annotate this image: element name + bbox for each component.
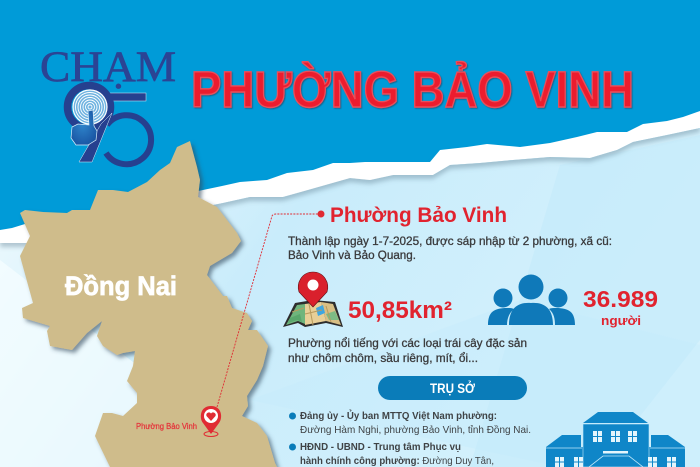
pale lower background	[0, 128, 700, 467]
address item 2: HĐND - UBND - Trung tâm Phục vụ	[300, 441, 461, 453]
stat: area: 50,85km²	[348, 297, 452, 324]
icon: headquarters building	[546, 412, 685, 467]
ward label on map: Phường Bảo Vinh	[136, 422, 197, 431]
specialty text: như chôm chôm, sầu riêng, mít, ổi...	[288, 351, 478, 365]
dotted connector line	[217, 210, 324, 407]
address item 1: Đảng ủy - Ủy ban MTTQ Việt Nam phường:	[300, 409, 497, 422]
address list	[289, 409, 531, 467]
info panel heading: Phường Bảo Vinh	[330, 204, 507, 227]
icon: people	[488, 274, 575, 325]
logo number 9	[68, 86, 112, 162]
intro text: Bảo Vinh và Bảo Quang.	[288, 248, 416, 262]
icon: map with pin	[283, 272, 343, 327]
province name: Đồng Nai	[65, 271, 177, 301]
intro text	[288, 234, 612, 262]
specialty text: Phường nổi tiếng với các loại trái cây đặc sản	[288, 336, 527, 350]
logo number 5	[106, 93, 151, 164]
section pill: Trụ sở: TRỤ SỞ	[430, 381, 475, 396]
stat: population: 36.989	[583, 286, 658, 312]
logo: Chạm 95	[40, 44, 176, 164]
torn paper edge	[0, 111, 700, 243]
title: PHƯỜNG BẢO VINH	[191, 60, 634, 118]
logo fingerprint	[73, 90, 107, 124]
stat: population: người	[601, 313, 641, 328]
province shape	[20, 141, 277, 467]
specialty text	[288, 336, 527, 365]
icon: location marker	[201, 406, 221, 436]
address item 1	[289, 409, 531, 436]
logo word CHẠM: CHẠM	[40, 44, 176, 91]
section pill: Trụ sở	[378, 376, 527, 400]
address item 2	[289, 441, 494, 467]
map: Đồng Nai	[20, 141, 277, 467]
logo hand icon	[71, 110, 97, 145]
address item 1: Đường Hàm Nghi, phường Bảo Vinh, tỉnh Đồng Nai.	[300, 424, 531, 436]
stat: population	[583, 286, 658, 328]
address item 2: hành chính công phường: Đường Duy Tân,	[300, 455, 494, 467]
intro text: Thành lập ngày 1-7-2025, được sáp nhập từ 2 phường, xã cũ:	[288, 234, 612, 248]
